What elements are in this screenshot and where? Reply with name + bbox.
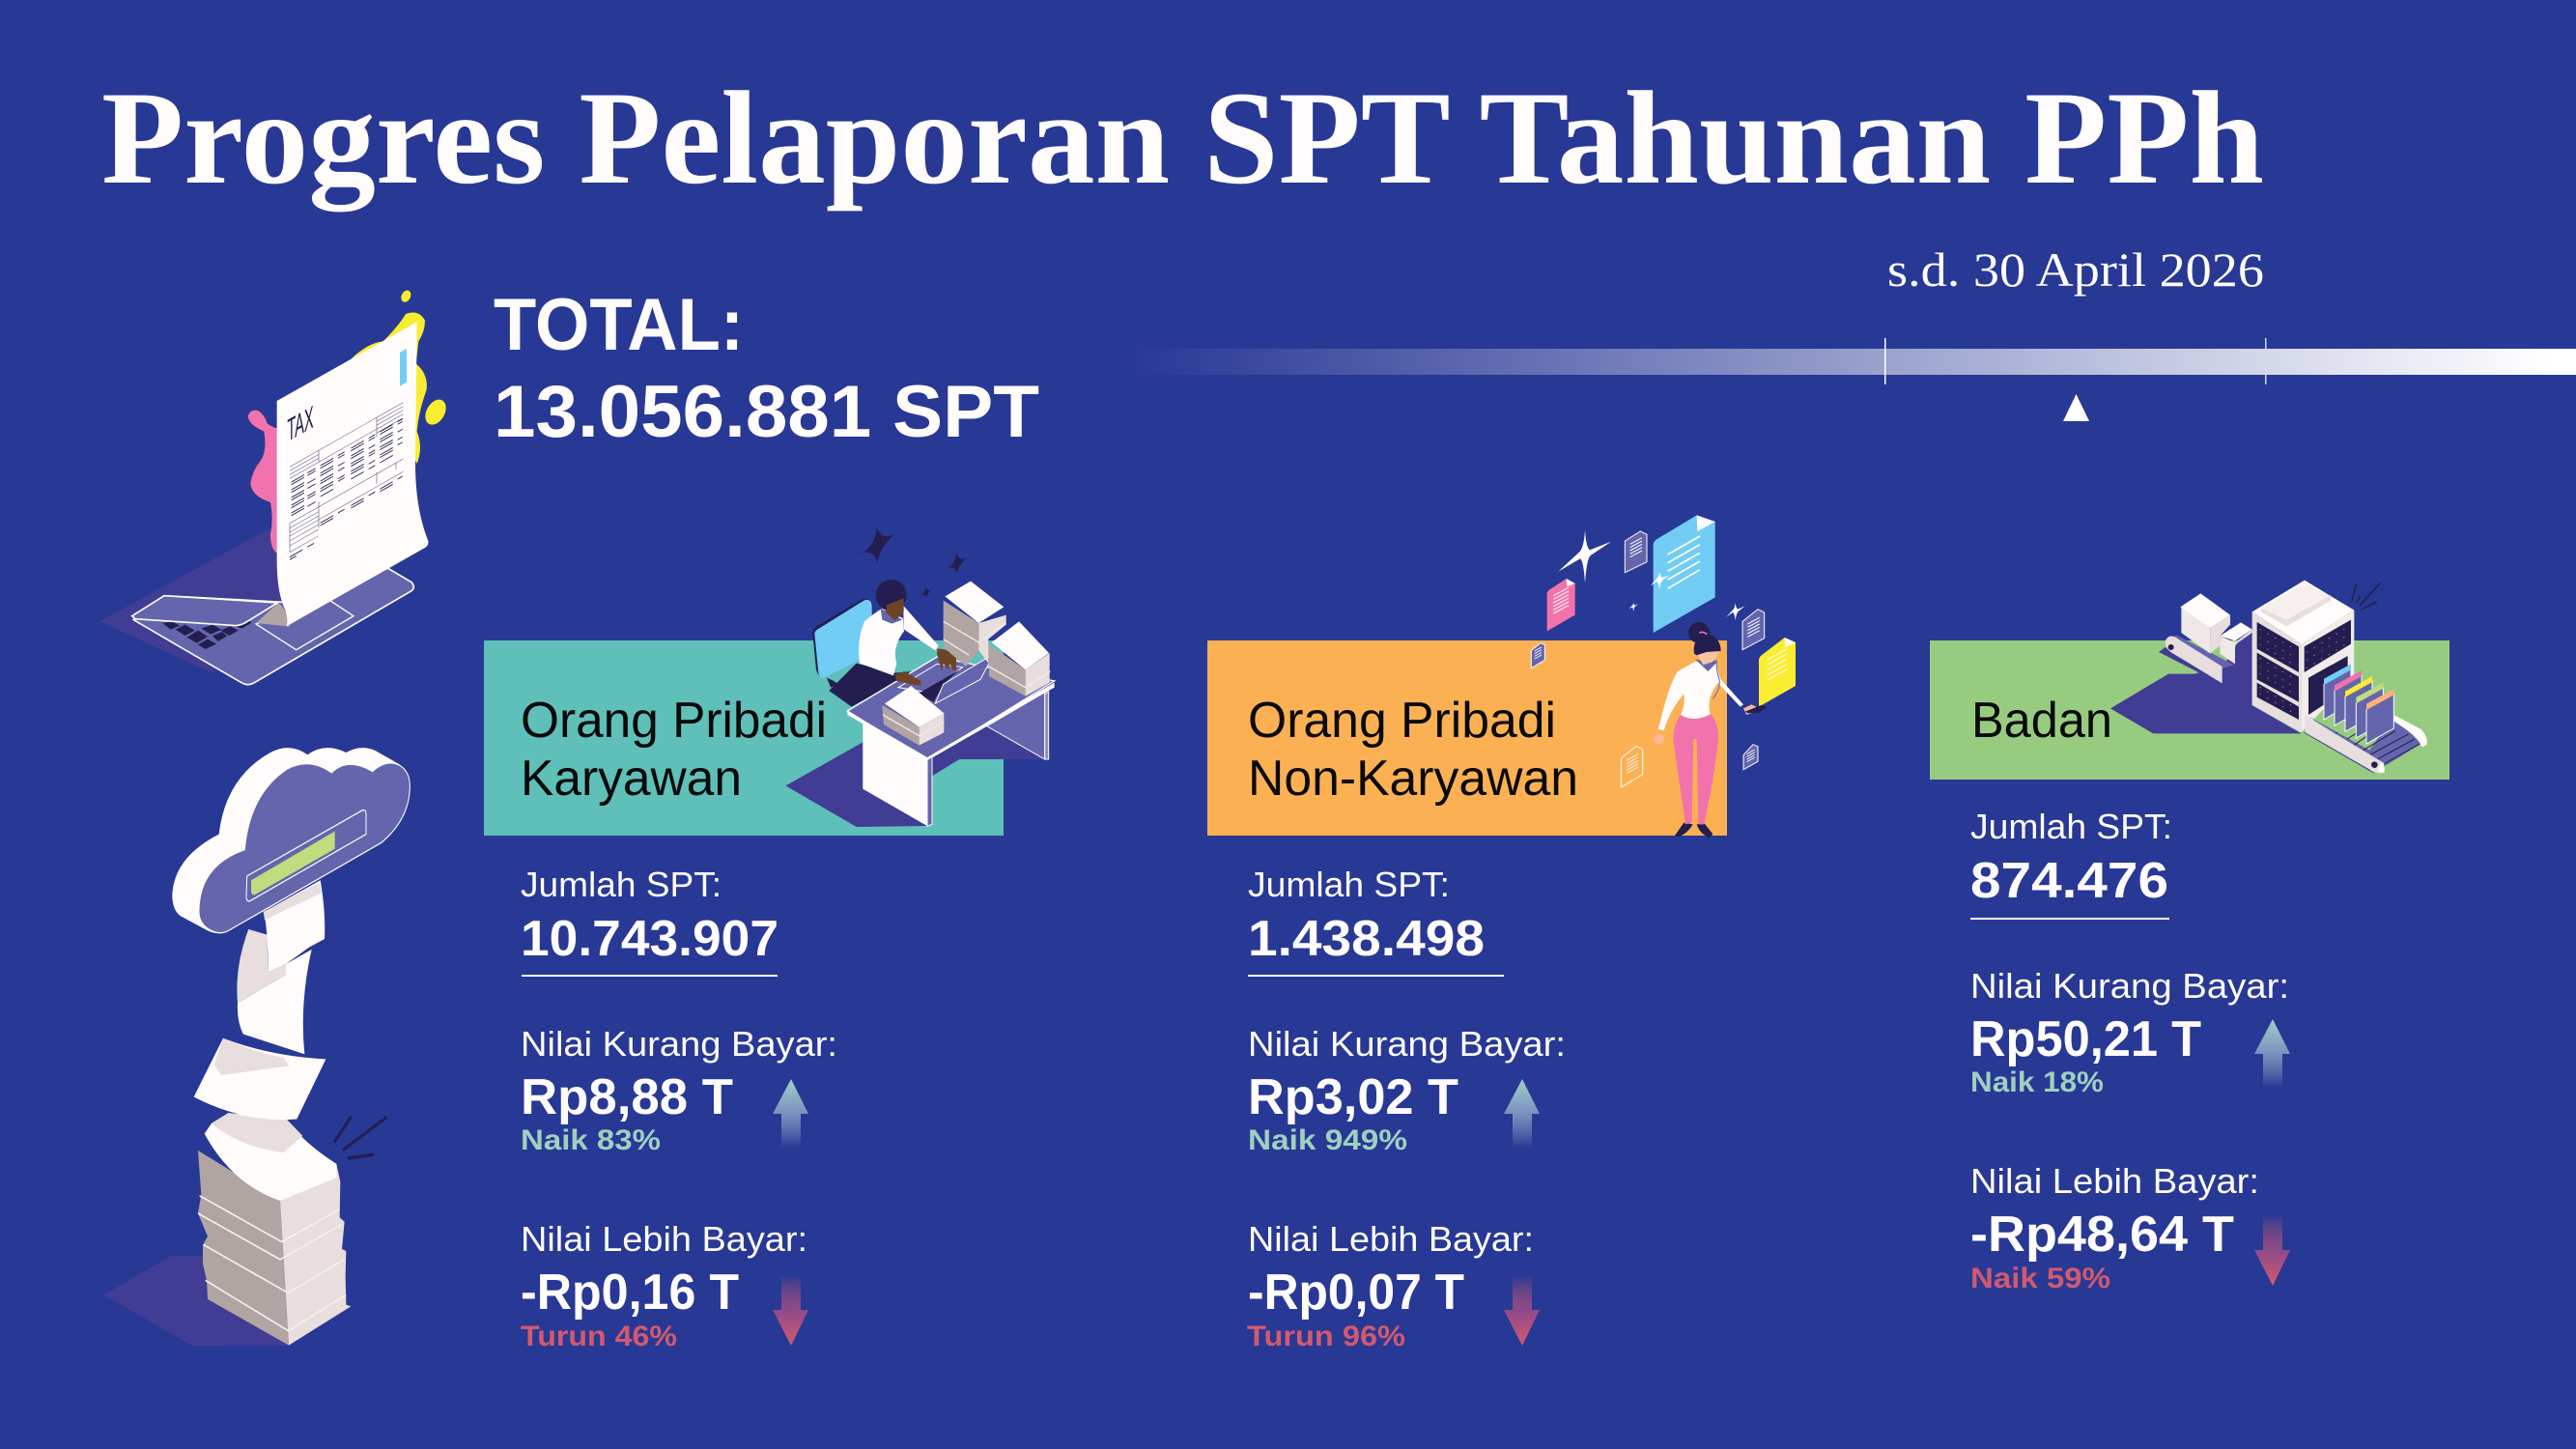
panel heading <box>1248 693 1578 807</box>
icon: cloud upload with falling paper stack <box>103 748 410 1347</box>
nilai kurang bayar: Nilai Kurang Bayar: <box>521 1024 837 1064</box>
nilai lebih bayar: Naik 59% <box>1970 1263 2110 1294</box>
document: small left <box>1531 643 1544 668</box>
arrow down <box>773 1275 808 1346</box>
nilai lebih bayar: Turun 96% <box>1247 1321 1405 1352</box>
paper stack <box>198 1113 351 1346</box>
document: purple <box>1625 531 1647 573</box>
icon: laptop with tax document <box>99 289 450 685</box>
panel heading: Karyawan <box>521 751 742 807</box>
jumlah SPT: Jumlah SPT: <box>521 865 722 904</box>
document: yellow <box>1759 638 1796 707</box>
nilai lebih bayar <box>521 1219 807 1352</box>
arrow up <box>773 1079 808 1148</box>
jumlah SPT <box>1970 807 2172 920</box>
nilai kurang bayar: Nilai Kurang Bayar: <box>1248 1024 1566 1064</box>
document: outline <box>1621 746 1643 787</box>
nilai lebih bayar: -Rp48,64 T <box>1970 1207 2234 1263</box>
panel background <box>1207 640 1727 836</box>
document: purple right <box>1742 610 1765 650</box>
nilai kurang bayar <box>1248 1024 1566 1156</box>
panel background <box>1930 640 2449 780</box>
output sheets <box>2324 668 2393 744</box>
panel heading: Badan <box>1971 693 2112 749</box>
jumlah SPT: 874.476 <box>1970 853 2168 909</box>
illustration: person at desk <box>785 526 1055 827</box>
nilai kurang bayar: Rp8,88 T <box>521 1069 733 1125</box>
nilai kurang bayar: Nilai Kurang Bayar: <box>1970 966 2289 1006</box>
jumlah SPT: Jumlah SPT: <box>1970 807 2172 846</box>
nilai lebih bayar: Nilai Lebih Bayar: <box>1248 1219 1534 1259</box>
panel: badan <box>1930 581 2449 1294</box>
jumlah SPT <box>1248 865 1504 977</box>
nilai lebih bayar <box>1970 1161 2259 1294</box>
icon: laptop with tax document: TAX <box>287 399 314 449</box>
illustration: woman with documents <box>1531 515 1796 838</box>
nilai kurang bayar: Rp3,02 T <box>1248 1069 1458 1125</box>
panel: orang pribadi karyawan <box>484 526 1055 1352</box>
panel heading: Orang Pribadi <box>1248 693 1556 749</box>
document: pink <box>1547 579 1575 631</box>
document: blue <box>1654 515 1715 633</box>
arrow down <box>1504 1275 1540 1346</box>
nilai kurang bayar <box>521 1024 837 1156</box>
jumlah SPT: 1.438.498 <box>1248 911 1485 967</box>
arrow up <box>2254 1019 2290 1088</box>
jumlah SPT: Jumlah SPT: <box>1248 865 1450 904</box>
nilai kurang bayar: Naik 83% <box>521 1124 661 1156</box>
panel heading: Non-Karyawan <box>1248 751 1578 807</box>
woman <box>1654 622 1768 838</box>
nilai lebih bayar: Nilai Lebih Bayar: <box>521 1219 807 1259</box>
nilai lebih bayar: Nilai Lebih Bayar: <box>1970 1161 2259 1201</box>
nilai lebih bayar: -Rp0,07 T <box>1248 1264 1464 1321</box>
date label: s.d. 30 April 2026 <box>1887 242 2264 297</box>
jumlah SPT: 10.743.907 <box>521 911 778 967</box>
cloud <box>172 748 410 933</box>
timeline progress bar <box>1130 338 2576 421</box>
nilai kurang bayar: Naik 949% <box>1248 1124 1407 1156</box>
nilai lebih bayar: -Rp0,16 T <box>521 1264 739 1321</box>
nilai lebih bayar <box>1247 1219 1534 1352</box>
panel: orang pribadi non-karyawan <box>1207 515 1796 1352</box>
title: Progres Pelaporan SPT Tahunan PPh <box>101 64 2264 212</box>
jumlah SPT <box>521 865 778 977</box>
panel heading <box>521 693 827 807</box>
panel background <box>484 640 1004 836</box>
document: small right <box>1743 745 1758 770</box>
illustration: document machine <box>2110 581 2427 773</box>
total heading <box>494 284 1039 453</box>
nilai kurang bayar <box>1970 966 2289 1098</box>
nilai kurang bayar: Naik 18% <box>1970 1066 2104 1098</box>
arrow up <box>1504 1079 1540 1148</box>
falling sheets <box>194 880 326 1120</box>
total heading: 13.056.881 SPT <box>494 371 1039 453</box>
total heading: TOTAL: <box>494 284 744 366</box>
paper stacks <box>882 582 1050 746</box>
panel heading: Orang Pribadi <box>521 693 827 749</box>
nilai lebih bayar: Turun 46% <box>521 1321 677 1352</box>
arrow down <box>2254 1215 2290 1286</box>
nilai kurang bayar: Rp50,21 T <box>1970 1011 2201 1067</box>
